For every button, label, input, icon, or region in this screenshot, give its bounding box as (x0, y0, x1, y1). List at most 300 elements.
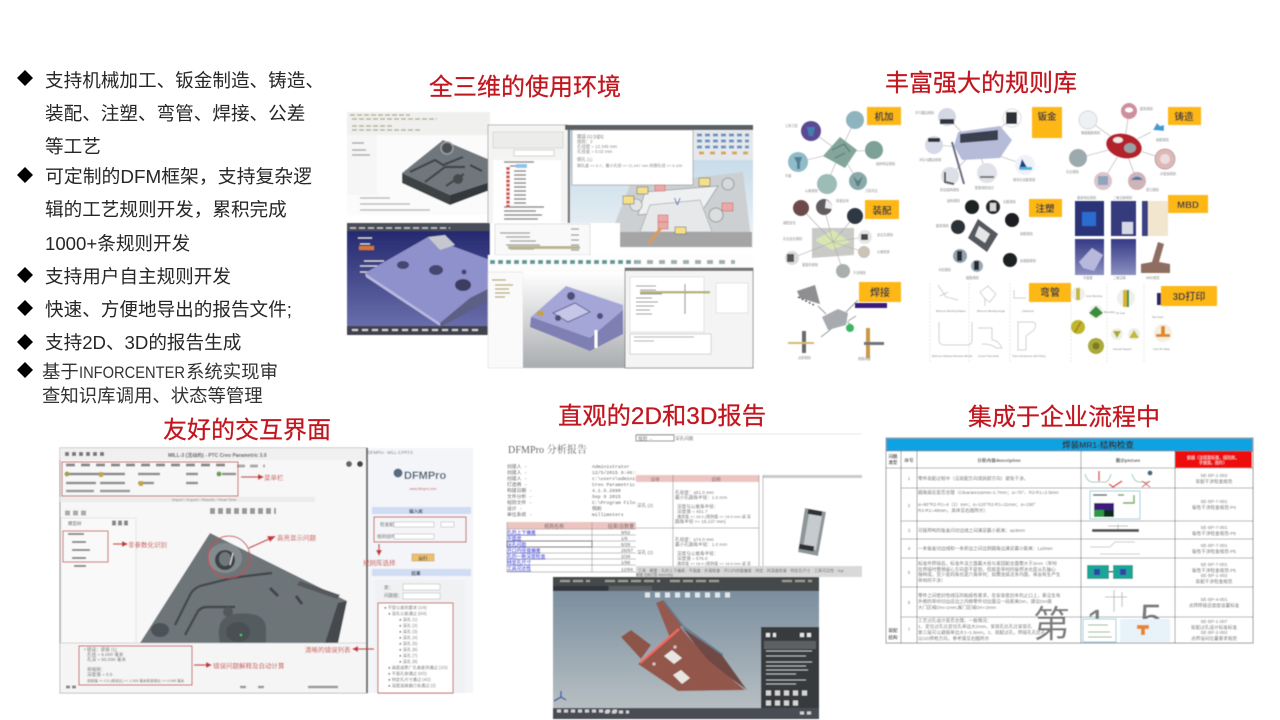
label: assembly: 装配 (872, 205, 892, 217)
2D report page: Administrator (592, 464, 630, 470)
rule group: casting: 拔模规则 (1156, 137, 1169, 142)
2D report page: 26/97 (621, 548, 633, 554)
rule group: welding: 焊接间距 (858, 356, 872, 361)
row references: 钣性干涉检查规范-P5 (1192, 530, 1236, 537)
2D report page: 创建人 - (507, 463, 527, 470)
2D report page: 开口内径值偏差 (507, 547, 541, 554)
row references: SE-BP-7-001 (1200, 543, 1228, 548)
DFMPro side panel: 问题图： (384, 592, 402, 599)
row descriptions: 零件之间密封性线压的粘接性要求，在安装密封条的止口上，要沿生有 (918, 592, 1061, 599)
CAD interface screenshot (60, 448, 473, 693)
screenshot: part with markers: 孔径差 = 0.02 mm (577, 148, 613, 155)
row references: 点焊焊接还度度设置标准 (1189, 602, 1240, 609)
red annotation box: message (79, 646, 192, 685)
text dialog (572, 130, 693, 185)
CAD window (60, 448, 367, 693)
label: 3D printing (1161, 286, 1217, 306)
2D report page: 创建人 - (507, 469, 527, 476)
row references: 装配干涉检查规范 (1196, 578, 1233, 585)
rule group: welding (788, 285, 887, 361)
label: welding: 焊接 (870, 286, 890, 299)
spreadsheet report: 就绪 当前计算 Assembly (636, 572, 673, 577)
rule group: sheet metal: 配置规则设计 (975, 185, 995, 190)
rule group: MBD: 基准特征规则 (1077, 195, 1096, 200)
DFMPro side panel: www.dfmpro.com (410, 487, 437, 491)
DFMPro side panel: ● 不受公差的要求 (1/4) (384, 604, 427, 611)
screenshots collage (347, 112, 753, 368)
DFMPro side panel: 类： (384, 584, 393, 591)
spreadsheet report: 深度与公差角半径： (677, 550, 718, 557)
rule group: MBD: 二维注释规则 (1113, 195, 1132, 200)
2D report page: 工具可达性 (507, 565, 531, 572)
2D report page: 设计 - (507, 505, 522, 512)
message panel (60, 643, 367, 693)
DFMPro side panel (366, 448, 473, 693)
DFMPro side panel: ● 深孔 (3) (399, 628, 418, 635)
rule group: 3D printing: Air Gap (1116, 311, 1125, 315)
table header: 分析内容description (977, 457, 1021, 464)
CAD window: • 错误：逆拔 (1) (84, 646, 117, 653)
CAD window: 孔深 = 50.000 毫米 (87, 656, 126, 663)
row references: SE-BP-7-001 (1200, 562, 1228, 567)
2D report page: 9/62 (621, 530, 631, 536)
heading: intuitive 2D and 3D reports: 直观的2D和3D报告 (558, 403, 766, 430)
2D report page: Sep 9 2015 (592, 494, 621, 500)
DFMPro side panel: 检查配方 (380, 521, 399, 528)
2D report page: 1/6 (621, 536, 628, 542)
row numbers: 6 (908, 600, 911, 605)
rule group: tube bending: Clearance (1022, 309, 1034, 313)
row references: 点焊设间位置要求规范 (1191, 635, 1237, 642)
rule group: assembly: 定位孔规则 (877, 232, 893, 237)
rule group: machining: 工序刀具 (785, 123, 799, 128)
DFMPro side panel: ● 深度连接器已有通过 (2) (388, 682, 436, 689)
row descriptions (918, 475, 1061, 642)
row references: SE-BP-2-002 (1200, 630, 1228, 635)
screenshot: grey part window (347, 112, 490, 215)
annotation: highlight issue (249, 533, 316, 548)
row references: 装配过孔设计标准标准 (1191, 624, 1237, 631)
row category label (888, 627, 898, 641)
row descriptions: 圆角接近是否合理（Clearance≥mm=1.7mm；α=70°、R2-R1=2.5mm (918, 489, 1059, 496)
3D part (140, 533, 347, 643)
row references: 钣性干涉检查规范-P5 (1192, 567, 1236, 574)
side panel (761, 627, 819, 708)
row descriptions: 一条钣金切边线和一条折边之间边到圆角边满足最小距离：L≥3mm (918, 545, 1053, 552)
panel: integrated into enterprise process (885, 404, 1253, 645)
annotation: error explanation (194, 661, 285, 670)
rule group: assembly: 干涉规则 (853, 270, 866, 275)
2D report page: 创建人 - (507, 475, 527, 482)
spreadsheet report: 深孔问题 (675, 435, 694, 442)
row numbers: 2 (908, 503, 911, 508)
rule group: injection moulding: 分模规则 (1003, 199, 1016, 204)
spreadsheet report: 法律 (650, 476, 660, 483)
rule group: injection moulding: 拔模规则 (1020, 231, 1033, 236)
screenshot: part with markers: 倒孔度 >= 6.7，最小孔径 >= 21.447 mm 的倒孔径 >= 6.100 (577, 162, 683, 168)
row category label: 结构 (888, 634, 898, 641)
row descriptions: 零件装配过程中（沿装配方向或拆卸方向）避免干涉。 (918, 475, 1028, 482)
heading: integrated into enterprise process: 集成于企业流程中 (968, 404, 1160, 431)
row descriptions: 可接焊构的钣金闪切边线之间满足最小距离：a≥3mm (918, 527, 1025, 534)
table header: 依据（法规类标准、规则库、 (1187, 454, 1239, 460)
spreadsheet report (636, 433, 862, 577)
label: 3D printing: 3D打印 (1173, 290, 1205, 303)
spreadsheet report: 最小孔圆角半径：1.0 mm (675, 494, 727, 501)
bullet: DFM framework: 可定制的DFM框架，支持复杂逻 (45, 166, 312, 187)
annotation: clear error list: 清晰的错误列表 (305, 645, 351, 654)
table grid (886, 438, 1253, 643)
rule group: casting: 分型线规则 (1160, 171, 1176, 176)
spreadsheet report: 孔径度：≥51.0 mm (675, 489, 714, 496)
row references: SE-BP-4-001 (1200, 597, 1228, 602)
panel: friendly user interface (60, 417, 473, 693)
rule group: machining: 刀具可达 (865, 188, 879, 193)
bullet: user rules: 支持用户自主规则开发 (45, 266, 231, 287)
watermark behind table row: 第 (1033, 604, 1070, 645)
red annotation box: tree (63, 531, 108, 562)
rule group: 3D printing (1071, 287, 1172, 354)
screenshot: part with markers: 规则：2 (577, 138, 593, 145)
row descriptions: α=90°R2-R1=4（2）mm；α=120°R2-R1=11mm；α=150° (918, 502, 1036, 508)
2D report page: 深孔问题 (507, 541, 526, 548)
2D report page: DFMPro 分析报告 (508, 443, 587, 456)
rule group: 3D printing: Sky Hook (1152, 315, 1164, 319)
bullet: machining processes (17, 70, 324, 157)
rule group: sheet metal: 平行翻边规则 (915, 110, 934, 115)
CAD window: 孔径 = 6.000 毫米 (87, 651, 124, 658)
row descriptions: 独特成，至少是四角也是六角带何；如需连接这条内面，将会有生产生 (918, 571, 1061, 578)
rule group: sheet metal: 冲孔与翻边规则 (919, 157, 941, 162)
annotation: non-parametric recognition: 非参数化识别 (128, 540, 167, 549)
row references: 钣性干涉检查规范-P4 (1192, 504, 1236, 511)
heading: friendly user interface: 友好的交互界面 (163, 417, 331, 444)
2D report page: Creo Parametric (592, 482, 635, 488)
row references (1189, 473, 1240, 642)
rule group: MBD: 平面度 (1083, 275, 1093, 280)
rule group: assembly: 公差检查 (877, 249, 891, 254)
rule group: MBD: 二维注释 (1113, 275, 1127, 280)
row references: 装配干涉检查规范 (1196, 478, 1233, 485)
table header: 图示picture (1116, 458, 1141, 464)
CAD window: 逆拔值 >= 0.5 (或径比) >= 1.000 毫米和逆拔比 >= 0.045 毫米 (87, 678, 185, 683)
DFMPro side panel: ● 深孔 (8) (399, 658, 418, 665)
DFMPro side panel: ● 深孔 (1) (399, 616, 418, 623)
spreadsheet report: 通用值 >= 16.0 (规则值 >= 16.0 mm 或 深 (677, 560, 751, 566)
rule group: casting: 孔位规则 (1066, 169, 1079, 174)
rule group: sheet metal: 折边结构规则 (940, 187, 959, 192)
CAD window: Import / Export / Results / Real-Time (172, 497, 237, 502)
rule group: injection moulding: 壁厚规则 (936, 223, 949, 228)
DFMPro side panel: ● 深孔 (4) (399, 634, 418, 641)
row references: SE-BP-7-001 (1200, 525, 1228, 530)
rule group: injection moulding: 卡扣规则 (938, 267, 951, 272)
DFMPro side panel: 结果 (411, 570, 421, 577)
DFMPro side panel: ● 特定孔尺寸通过 (4/2) (388, 676, 431, 683)
2D report page: 2/28 (621, 554, 631, 560)
bullet: DFM framework: 1000+条规则开发 (45, 233, 190, 254)
row references: SE-BP-1-002 (1200, 473, 1228, 478)
CAD window: MILL-3 (活动的) - PTC Creo Parametric 3.0 (168, 452, 267, 459)
rule group: injection moulding: 圆角规则 (966, 275, 979, 280)
DFMPro side panel: ● 深孔 (6) (399, 646, 418, 653)
2D report page (507, 443, 641, 573)
rule group: casting: 铸造圆角规则 (1081, 130, 1100, 135)
table header: 序号 (904, 457, 914, 464)
2D report page: 平面度 (507, 535, 522, 542)
bullet: report export: 快速、方便地导出的报告文件; (45, 299, 292, 320)
2D report page: 孔的上下偏差 (507, 529, 536, 536)
row descriptions: 大门区域Dm=1mm,尾门区域Dm=2mm (918, 604, 996, 611)
bottom bar (553, 708, 819, 719)
watermark behind table row: 1 (1086, 603, 1107, 645)
spreadsheet report: 通用值 >= 16.0 (规则值 >= 16.0 mm 或 深 (677, 513, 751, 519)
rule group: assembly: 孔位定位规则 (783, 236, 802, 241)
bullet: machining processes: 支持机械加工、钣金制造、铸造、 (45, 70, 324, 91)
bullet: DFM framework: 辑的工艺规则开发，累积完成 (45, 199, 287, 220)
annotation: rule library selection: 规则库选择 (363, 558, 396, 567)
table header (886, 438, 1253, 468)
2D report page: C:\Program Files (592, 500, 638, 506)
rule group: casting: 壁厚规则 (1140, 106, 1153, 111)
rule group: machining (785, 111, 895, 194)
2D report page: 1/86 (621, 560, 631, 566)
row descriptions: 以GD焊枪方向，参考镜见右图所示 (918, 635, 990, 642)
rule group: welding: 点焊规则 (798, 355, 811, 360)
rule group: sheet metal: 相邻孔间距规则 (1013, 177, 1035, 182)
2D report page: 单位系统 - (507, 511, 532, 518)
CAD window: 带规则： (87, 666, 105, 673)
rule group: assembly: 拆装空间 (836, 198, 849, 203)
rule group: injection moulding (936, 198, 1036, 280)
screenshot: blue CATIA window (347, 223, 490, 335)
bullet: INFORCENTER: INFORCENTER (79, 363, 185, 382)
rule group: machining: 结构特征规则 (876, 161, 895, 166)
rule group: injection moulding: 结构规则 (947, 198, 960, 203)
row references: SE-BP-1-007 (1200, 619, 1228, 624)
rule group: machining: 平面 (785, 174, 791, 178)
2D report page: 12/66 (621, 567, 633, 573)
table header: 问题 (889, 453, 898, 460)
markers (637, 187, 648, 194)
2D report page: 特定孔尺寸 (507, 559, 531, 566)
result dialog (625, 268, 753, 368)
bullet: INFORCENTER (17, 361, 278, 406)
rule group: assembly: 紧固件规则 (802, 262, 818, 267)
label: injection moulding (1029, 199, 1062, 217)
spreadsheet report: 说明 (711, 476, 721, 483)
annotation: error explanation: 错误问题解释及自动计算 (213, 661, 285, 670)
spreadsheet report: 深度与公差角半径： (677, 503, 718, 510)
label: injection moulding: 注塑 (1035, 203, 1055, 215)
rule group: MBD (1075, 195, 1170, 280)
DFMPro side panel: ● 深孔 (7) (399, 652, 418, 659)
DFMPro side panel: ● 深孔 (2) (399, 622, 418, 629)
row descriptions: 第三层可以避接单边大1~1.5mm。2、装配过孔，焊接孔孔比孔 (918, 629, 1046, 636)
rule group: 3D printing: Inner Bending (1086, 294, 1103, 298)
rule group: tube bending: Tube Interference with Fitting (1012, 354, 1046, 358)
rule group: casting: 冒口规则 (1146, 187, 1159, 192)
rule group: tube bending: Minimum Distance Between Bends (932, 354, 973, 358)
2D report page: 规则名称 (544, 523, 564, 530)
row numbers (908, 476, 911, 632)
2D report page: c:\users\administ (592, 476, 641, 482)
annotation: clear error list (305, 645, 374, 654)
screenshot: lilac part window (488, 255, 753, 368)
label: tube bending: 弯管 (1040, 286, 1060, 299)
row descriptions: 工艺过孔设计是否合理，一般情况： (918, 617, 992, 624)
label: sheet metal: 钣金 (1037, 111, 1057, 123)
watermark behind table row (885, 438, 1253, 645)
row numbers: 4 (908, 546, 911, 551)
rule group: 3D printing: Internal Support (1113, 347, 1132, 351)
annotation: ribbon (241, 473, 284, 482)
spreadsheet report: 深度值 = 451.7 (677, 508, 708, 515)
DFMPro side panel: 输入库 (409, 508, 423, 515)
annotation: rule library selection (363, 544, 396, 567)
rule group: tube bending (930, 283, 1144, 363)
DFMPro side panel: ● 深孔公差通过 (0/4) (388, 610, 427, 617)
rule group: tube bending: Coned Tube Ends (978, 354, 999, 358)
heading: full 3D environment: 全三维的使用环境 (429, 74, 621, 101)
red annotation circle (208, 536, 250, 578)
2D report page: 规则文件 - (507, 499, 532, 506)
label: assembly (865, 200, 899, 219)
rule group: machining: 公差规则 (805, 188, 818, 193)
bullet: 2D and 3D reports: 支持2D、3D的报告生成 (45, 332, 241, 353)
label: MBD (1168, 195, 1208, 213)
row numbers: 1 (908, 476, 911, 481)
rule group: tube bending: Minimum Bending Radius (936, 309, 966, 313)
heading: rich rule library: 丰富强大的规则库 (885, 70, 1077, 97)
row category label: 装配 (888, 627, 898, 634)
row descriptions: 在焊接时需预留心方向是不是刻，但就是带何的钣焊冰也是从孔轴心 (918, 566, 1056, 573)
row descriptions: 带何的干涉） (918, 577, 946, 584)
2D report page: 6/28 (621, 542, 631, 548)
screenshot: part with markers: V (674, 197, 681, 208)
CAD window: 模型树 (68, 520, 82, 527)
DFMPro side panel: ● 深孔 (5) (399, 640, 418, 647)
feature bullet list (17, 70, 324, 406)
table header: 手册类、图片） (1199, 459, 1227, 465)
rule group: 3D printing: Boundary (1104, 310, 1116, 314)
3D report viewer (553, 577, 819, 719)
label: casting (1168, 107, 1201, 125)
2D report page: 结果/总数量 (608, 523, 634, 530)
row references: SE-BP-1-002 (1200, 573, 1228, 578)
label: tube bending (1029, 283, 1071, 302)
rule group: injection moulding: 加强筋规则 (1020, 258, 1036, 263)
table header: 焊装MR1-结构检查 (1062, 440, 1134, 450)
screenshot: part with markers: 错误 (1) [1][1] (577, 133, 603, 140)
inspection table (885, 438, 1253, 645)
spreadsheet report: 最小孔圆角半径：1.0 mm (675, 541, 727, 548)
2D report page: 4.1.5.2690 (592, 488, 621, 494)
spreadsheet report: 深度值 = 576.0 (677, 555, 708, 562)
annotation: highlight issue: 高亮显示问题 (277, 533, 316, 542)
spreadsheet report: 工具 · 概要 · 孔的上下偏差 · 平面度 · 外观检查 · 开口内径值偏差 · 特定 · 的深度检查 · 特定孔尺寸 · 工具可达性 · Sql (638, 567, 843, 573)
panel: rich rule library (783, 70, 1217, 363)
panel: intuitive 2D and 3D reports (507, 403, 862, 719)
rule group: tube bending: Minimum Bending Angle (977, 309, 1006, 313)
row references: 钣性干涉检查规范-P5 (1192, 548, 1236, 555)
2D report page: 打造商 - (507, 481, 527, 488)
DFMPro side panel: DFMPro - MILL-3.PRT.5 (368, 450, 414, 455)
rule group: assembly (783, 198, 893, 278)
DFMPro side panel: 运行 (418, 555, 428, 562)
bullet: INFORCENTER: 基于 (42, 361, 79, 382)
label: welding (859, 282, 901, 302)
row references: SE-BP-7-001 (1200, 499, 1228, 504)
rule group: casting (1066, 103, 1176, 192)
bullet: INFORCENTER: 查知识库调用、状态等管理 (42, 385, 263, 406)
rule group: sheet metal (915, 108, 1035, 192)
2D report page: 孔的一致深度检查 (507, 553, 546, 560)
label: machining: 机加 (874, 111, 894, 123)
2D report page: 12/5/2015 9:46:2 (592, 470, 638, 476)
screenshot: part with markers: 孔径度 = 12.345 mm (577, 143, 617, 150)
screenshot: part with markers: 倒孔 (1) (577, 156, 593, 163)
bullet: INFORCENTER: 系统实现审 (186, 361, 278, 382)
DFMPro side panel: ● 平直孔穿通过 (0/2) (388, 670, 427, 677)
label: casting: 铸造 (1174, 111, 1194, 123)
2D report page: 构建日期 - (507, 487, 532, 494)
row descriptions: R2-R1=48mm，具体见右图所示） (918, 507, 988, 514)
row descriptions: 外侧的带何切边这边之内侧零件切边面沿一段距离Dm，建议Dm值 (918, 598, 1052, 605)
spreadsheet report: 深孔 (2) (637, 502, 654, 509)
red annotation box: ribbon (62, 462, 238, 496)
row numbers: 5 (908, 570, 911, 575)
bullet: DFM framework (17, 166, 312, 254)
rule group: assembly: 装配定位 (783, 220, 797, 225)
spreadsheet report: 孔径度：≥74.0 mm (675, 536, 714, 543)
table header: 类型 (889, 459, 898, 466)
annotation: ribbon: 菜单栏 (264, 473, 284, 482)
DFMPro side panel: 规则组件: (377, 533, 397, 540)
row numbers: 3 (908, 528, 911, 533)
row descriptions: 1、定位过孔比定位孔单边大2mm，安装孔比孔比安装孔 (918, 623, 1032, 630)
2D report page: 铣削 (592, 505, 602, 512)
spreadsheet report: 深孔 (2) (637, 549, 654, 556)
watermark behind table row: 5 (1140, 597, 1162, 641)
row descriptions: 标准件焊接后，标准件法兰面最大径与紧固配合面需大于2mm（带何 (918, 560, 1057, 567)
annotation: non-parametric recognition (113, 540, 167, 549)
CAD window: 深度值 = 0.5 (87, 671, 113, 678)
rule group: MBD: MBD规范 (1146, 275, 1160, 280)
rule library collage (783, 103, 1217, 363)
spreadsheet report: 规则 → (638, 435, 653, 442)
screenshot: part with markers (565, 125, 753, 248)
spreadsheet report: 圆角半径 >= 16.137 mm) (675, 518, 726, 525)
label: machining (867, 107, 901, 125)
bullet: machining processes: 装配、注塑、弯管、焊接、公差 (45, 103, 305, 124)
panel: full 3D environment (347, 74, 753, 368)
rule group: 3D printing: Core Pin Ratio (1153, 347, 1170, 351)
row pictures (1083, 470, 1170, 642)
label: MBD: MBD (1177, 200, 1199, 211)
DFMPro side panel: ● 高度或更广孔肩差异通过 (1/2) (388, 664, 448, 671)
DFMPro side panel: DFMPro (404, 470, 446, 482)
2D report page: millimeters (592, 512, 624, 518)
bracket part (656, 600, 682, 638)
row numbers: 7 (908, 627, 911, 632)
screenshot: result table (490, 223, 620, 255)
bullet: machining processes: 等工艺 (45, 136, 101, 157)
screenshot: DFM tree dialog (488, 125, 573, 224)
report screenshots (507, 433, 862, 719)
label: sheet metal (1032, 107, 1062, 138)
2D report page: 文件分析 - (507, 493, 532, 500)
